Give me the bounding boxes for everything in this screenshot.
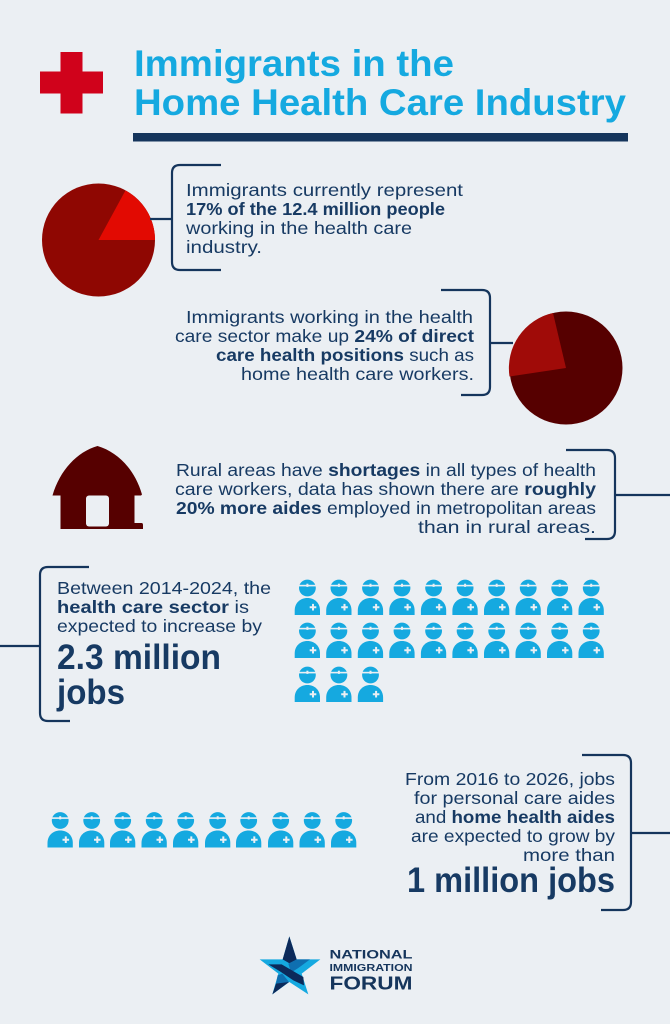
text: 17 percent: Immigrants currently represent (186, 180, 463, 200)
icon: barn (52, 446, 143, 529)
bracket: 2.3 million (0, 567, 89, 721)
wordmark: IMMIGRATION (330, 962, 412, 974)
text: 1 million jobs: more than (523, 845, 615, 865)
text: 24 percent: care health positions such as (216, 345, 474, 365)
text: 24 percent: care sector make up 24% of direct (175, 326, 474, 346)
text: rural areas: Rural areas have shortages in all types of health (176, 460, 596, 480)
text: 17 percent (185, 180, 463, 257)
text: 2.3 million jobs: 2.3 million (57, 638, 221, 677)
text: 2.3 million jobs: Between 2014-2024, the (57, 578, 271, 598)
pie chart: 24 percent (509, 312, 622, 424)
icon grid: 23 workers (295, 580, 604, 702)
text: 24 percent (175, 307, 474, 384)
text: rural areas: 20% more aides employed in metropolitan areas (176, 498, 596, 518)
wordmark: NATIONAL (330, 948, 412, 962)
text: rural areas: care workers, data has shown there are roughly (175, 479, 596, 499)
text: 1 million jobs (405, 769, 615, 900)
text: 2.3 million jobs: jobs (56, 673, 125, 712)
text: rural areas: than in rural areas. (418, 517, 596, 537)
logo: National Immigration Forum (260, 936, 412, 994)
text: 1 million jobs: and home health aides (415, 807, 615, 827)
bracket: 17 percent (150, 165, 221, 270)
title (134, 43, 626, 123)
icon: red cross (40, 52, 103, 114)
bracket: 24 percent (441, 290, 513, 395)
bracket: rural areas (566, 450, 670, 539)
text: 24 percent: home health care workers. (241, 364, 474, 384)
bracket: 1 million (582, 755, 670, 910)
wordmark: FORUM (330, 974, 412, 994)
title rule (133, 133, 628, 142)
text: 17 percent: industry. (186, 237, 262, 257)
text: 24 percent: Immigrants working in the health (186, 307, 473, 327)
text: 17 percent: 17% of the 12.4 million people (186, 199, 445, 219)
text: 17 percent: working in the health care (185, 218, 412, 238)
wordmark (330, 948, 412, 994)
title: Home Health Care Industry (134, 82, 626, 123)
text: 2.3 million jobs (56, 578, 271, 712)
pie chart: 17 percent (42, 184, 155, 296)
text: 1 million jobs: From 2016 to 2026, jobs (405, 769, 615, 789)
icon row: 10 workers (48, 812, 356, 848)
text: 1 million jobs: for personal care aides (414, 788, 615, 808)
text: 1 million jobs: are expected to grow by (411, 826, 615, 846)
icon: star (260, 936, 320, 994)
title: Immigrants in the (134, 43, 454, 84)
text: 2.3 million jobs: expected to increase by (57, 616, 262, 636)
text: rural areas (175, 460, 596, 537)
text: 1 million jobs: 1 million jobs (407, 861, 615, 900)
text: 2.3 million jobs: health care sector is (57, 597, 249, 617)
